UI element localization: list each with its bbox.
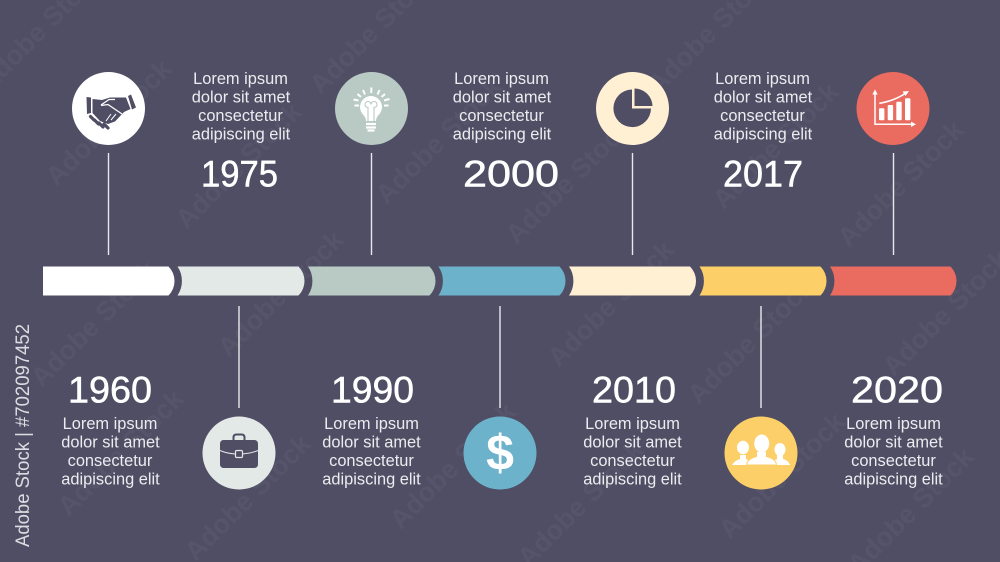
text block 2020: dolor sit amet xyxy=(844,434,943,452)
segment 2017 xyxy=(700,266,827,296)
text: Adobe Stock xyxy=(384,396,522,535)
text: Adobe Stock xyxy=(40,53,178,192)
text block 2000: dolor sit amet xyxy=(453,88,552,106)
year 2020: 2020 xyxy=(851,370,943,410)
text: Adobe Stock xyxy=(707,76,845,215)
connector 1990 xyxy=(371,153,372,255)
text block 2020: adipiscing elit xyxy=(844,470,943,488)
icon: dollar xyxy=(464,416,536,490)
year 1975: 1975 xyxy=(201,154,278,194)
connector 2010 xyxy=(632,153,633,255)
text block 2010: dolor sit amet xyxy=(583,434,682,452)
text: Adobe Stock xyxy=(500,111,638,250)
text: Adobe Stock xyxy=(370,71,508,210)
segment 2000 xyxy=(438,266,566,296)
text block 2017: Lorem ipsum xyxy=(715,70,810,88)
text block 2010: adipiscing elit xyxy=(583,470,682,488)
text block 2000: Lorem ipsum xyxy=(454,70,549,88)
text: Adobe Stock xyxy=(25,254,163,393)
stock credit: Adobe Stock | #702097452 xyxy=(13,324,34,547)
year 1990: 1990 xyxy=(331,370,414,410)
text: Adobe Stock xyxy=(52,383,190,522)
year 2017: 2017 xyxy=(723,154,803,194)
text block 1960: consectetur xyxy=(68,452,153,470)
text block 1960 xyxy=(61,415,160,488)
icon: briefcase xyxy=(202,416,276,490)
text block 2010 xyxy=(583,415,682,488)
text block 2017 xyxy=(714,70,813,144)
text block 1990: dolor sit amet xyxy=(322,434,421,452)
text block 2020 xyxy=(844,415,943,488)
text block 2010: consectetur xyxy=(590,452,675,470)
text: Adobe Stock xyxy=(682,271,820,410)
text: Adobe Stock xyxy=(832,114,970,253)
segment 2020 xyxy=(830,266,957,296)
icon: team xyxy=(724,416,798,490)
text block 1990: consectetur xyxy=(329,452,414,470)
timeline bar xyxy=(43,266,957,296)
text: Adobe Stock xyxy=(170,96,308,235)
year 2010: 2010 xyxy=(592,370,676,410)
segment 1975 xyxy=(178,266,305,296)
segment 1960 xyxy=(43,266,175,296)
text: Adobe Stock xyxy=(542,234,680,373)
connector 2020 xyxy=(893,153,894,255)
text block 1960: adipiscing elit xyxy=(61,470,160,488)
icon: handshake xyxy=(72,72,145,145)
connector 2017 xyxy=(760,306,762,408)
text block 2017: dolor sit amet xyxy=(714,88,813,106)
connector 1975 xyxy=(238,306,240,408)
segment 2010 xyxy=(569,266,696,296)
text block 2000: consectetur xyxy=(459,107,544,125)
text block 1960: Lorem ipsum xyxy=(63,415,157,433)
text block 2020: Lorem ipsum xyxy=(846,415,941,433)
year 2000: 2000 xyxy=(463,154,559,194)
text block 1960: dolor sit amet xyxy=(61,434,160,452)
icon: lightbulb xyxy=(335,72,408,145)
text block 1975: dolor sit amet xyxy=(192,88,291,106)
text block 2000 xyxy=(453,70,552,144)
text block 2000: adipiscing elit xyxy=(453,126,552,144)
segment 1990 xyxy=(308,266,436,296)
year 1960: 1960 xyxy=(68,370,152,410)
text block 1975: Lorem ipsum xyxy=(193,70,288,88)
text block 2017: adipiscing elit xyxy=(714,126,813,144)
icon: dollar: $ xyxy=(486,425,514,481)
text block 1975: consectetur xyxy=(198,107,283,125)
text block 1990: Lorem ipsum xyxy=(324,415,419,433)
text block 1990 xyxy=(322,415,421,488)
text block 2017: consectetur xyxy=(720,107,805,125)
connector 1960 xyxy=(108,153,109,255)
text block 2010: Lorem ipsum xyxy=(585,415,680,433)
connector 2000 xyxy=(499,306,501,408)
text block 2020: consectetur xyxy=(851,452,936,470)
text block 1990: adipiscing elit xyxy=(322,470,421,488)
icon: growth chart xyxy=(856,72,930,145)
text block 1975 xyxy=(192,70,291,144)
text block 1975: adipiscing elit xyxy=(192,126,291,144)
icon: pie chart xyxy=(596,72,669,145)
text: Adobe Stock xyxy=(212,224,350,363)
text: Adobe Stock xyxy=(713,406,851,545)
